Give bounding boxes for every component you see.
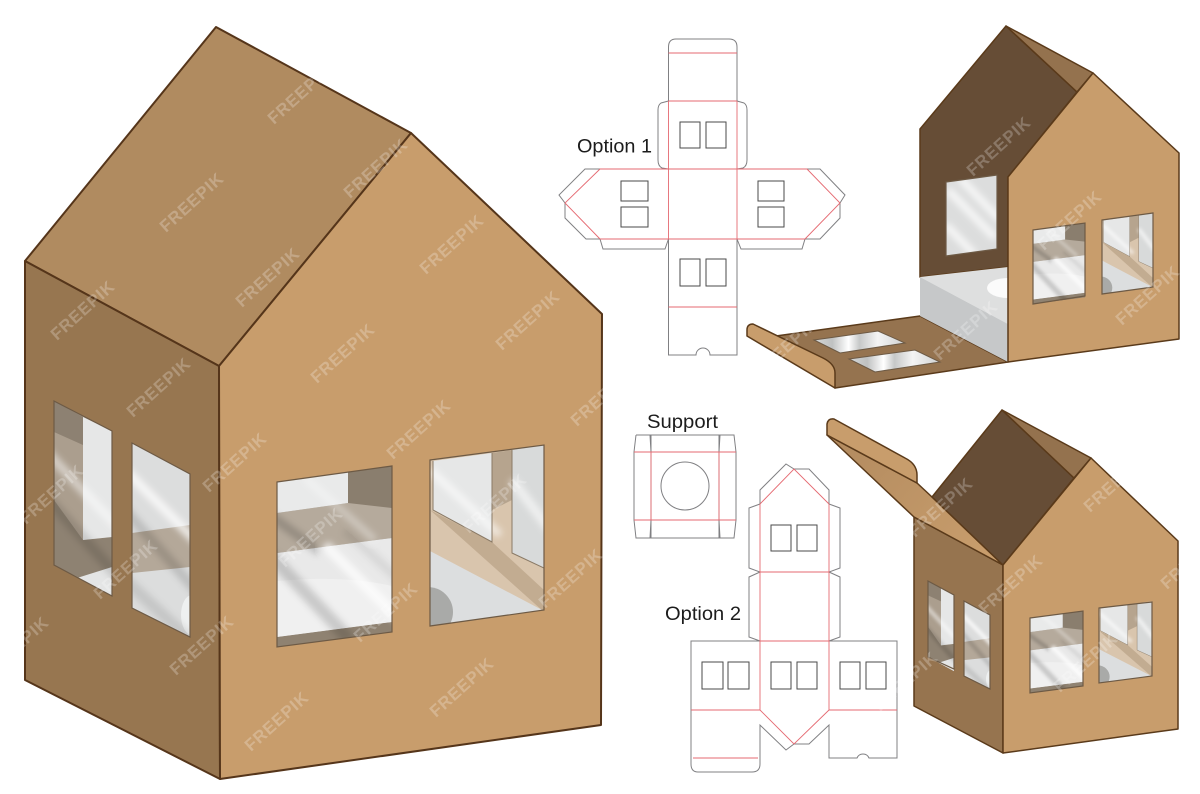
watermarks: FREEPIK <box>930 297 1002 364</box>
front window 1 <box>1027 608 1091 694</box>
watermarks: FREEPIK <box>416 211 488 278</box>
watermarks: FREEPIK <box>232 244 304 311</box>
left wall <box>25 261 220 779</box>
left wall window 2 <box>125 440 203 640</box>
watermarks: FREEPIK <box>870 648 942 715</box>
watermarks: FREEPIK <box>1034 187 1106 254</box>
support insert top <box>920 267 1008 324</box>
support label: Support <box>647 411 719 433</box>
option 1 dieline <box>559 39 845 355</box>
option 2 label: Option 2 <box>665 603 741 625</box>
watermarks: FREEPIK <box>905 474 977 541</box>
watermarks: FREEPIK <box>426 654 498 721</box>
watermarks: FREEPIK <box>156 169 228 236</box>
support dieline <box>634 435 736 538</box>
front gabled wall <box>219 133 602 779</box>
option 1 label: Option 1 <box>577 136 652 158</box>
watermarks: FREEPIK <box>350 579 422 646</box>
watermarks: FREEPIK <box>750 314 822 381</box>
closing lip <box>747 324 835 388</box>
left wall window 1 <box>40 395 130 605</box>
front gabled wall <box>1008 73 1179 362</box>
watermarks: FREEPIK <box>1112 262 1184 329</box>
open house mockup, top right <box>747 26 1179 388</box>
watermarks: FREEPIK <box>383 396 455 463</box>
watermarks: FREEPIK <box>567 363 639 430</box>
watermarks: FREEPIK <box>1050 629 1122 696</box>
watermarks: FREEPIK <box>340 135 412 202</box>
support insert hole <box>987 278 1029 298</box>
support insert side <box>920 277 1008 362</box>
cut lines <box>559 39 845 355</box>
watermarks: FREEPIK <box>975 551 1047 618</box>
support circle <box>661 462 709 510</box>
front window 2 <box>1086 599 1155 688</box>
watermarks: FREEPIK <box>123 354 195 421</box>
support cut lines <box>634 435 736 538</box>
option 2 cut lines <box>691 464 897 772</box>
roof underside <box>1002 410 1091 478</box>
watermarks: FREEPIK <box>264 61 336 128</box>
front window 1 <box>1030 220 1093 305</box>
watermarks: FREEPIK <box>459 470 531 537</box>
front window 2 <box>403 440 550 637</box>
roof underside <box>1006 26 1093 92</box>
watermarks: FREEPIK <box>16 461 88 528</box>
watermarks: FREEPIK <box>1080 449 1152 516</box>
left window 2 <box>961 600 996 691</box>
watermarks: FREEPIK <box>47 277 119 344</box>
option 2 fold lines <box>691 469 897 758</box>
front wall <box>1003 458 1178 753</box>
watermarks: FREEPIK <box>492 287 564 354</box>
main house box mockup <box>25 27 602 779</box>
back wall window <box>946 175 1000 256</box>
house mockup with open lid, bottom right <box>827 410 1178 753</box>
lid panel <box>827 435 1003 565</box>
watermarks: FREEPIK <box>90 536 162 603</box>
option 2 dieline <box>691 464 897 772</box>
floor window 2 <box>849 350 940 372</box>
interior dark panel <box>932 410 1074 565</box>
floor window 1 <box>814 331 905 353</box>
front window 1 <box>270 460 410 650</box>
front window 2 <box>1090 211 1156 299</box>
left window 1 <box>922 578 962 675</box>
roof panel <box>25 27 411 366</box>
fold lines <box>565 53 840 307</box>
watermarks: FREEPIK <box>166 612 238 679</box>
left wall <box>914 517 1003 753</box>
floor flap with windows <box>776 316 1008 388</box>
watermarks: FREEPIK <box>307 320 379 387</box>
watermarks: FREEPIK <box>199 429 271 496</box>
window cut-outs <box>621 122 784 286</box>
watermarks: FREEPIK <box>535 545 607 612</box>
option 2 window cut-outs <box>702 525 886 689</box>
interior back wall <box>920 26 1077 277</box>
watermarks: FREEPIK <box>241 688 313 755</box>
watermarks: FREEPIK <box>963 113 1035 180</box>
lid lip <box>827 419 917 483</box>
watermarks: FREEPIK <box>275 504 347 571</box>
support fold lines <box>634 452 736 520</box>
